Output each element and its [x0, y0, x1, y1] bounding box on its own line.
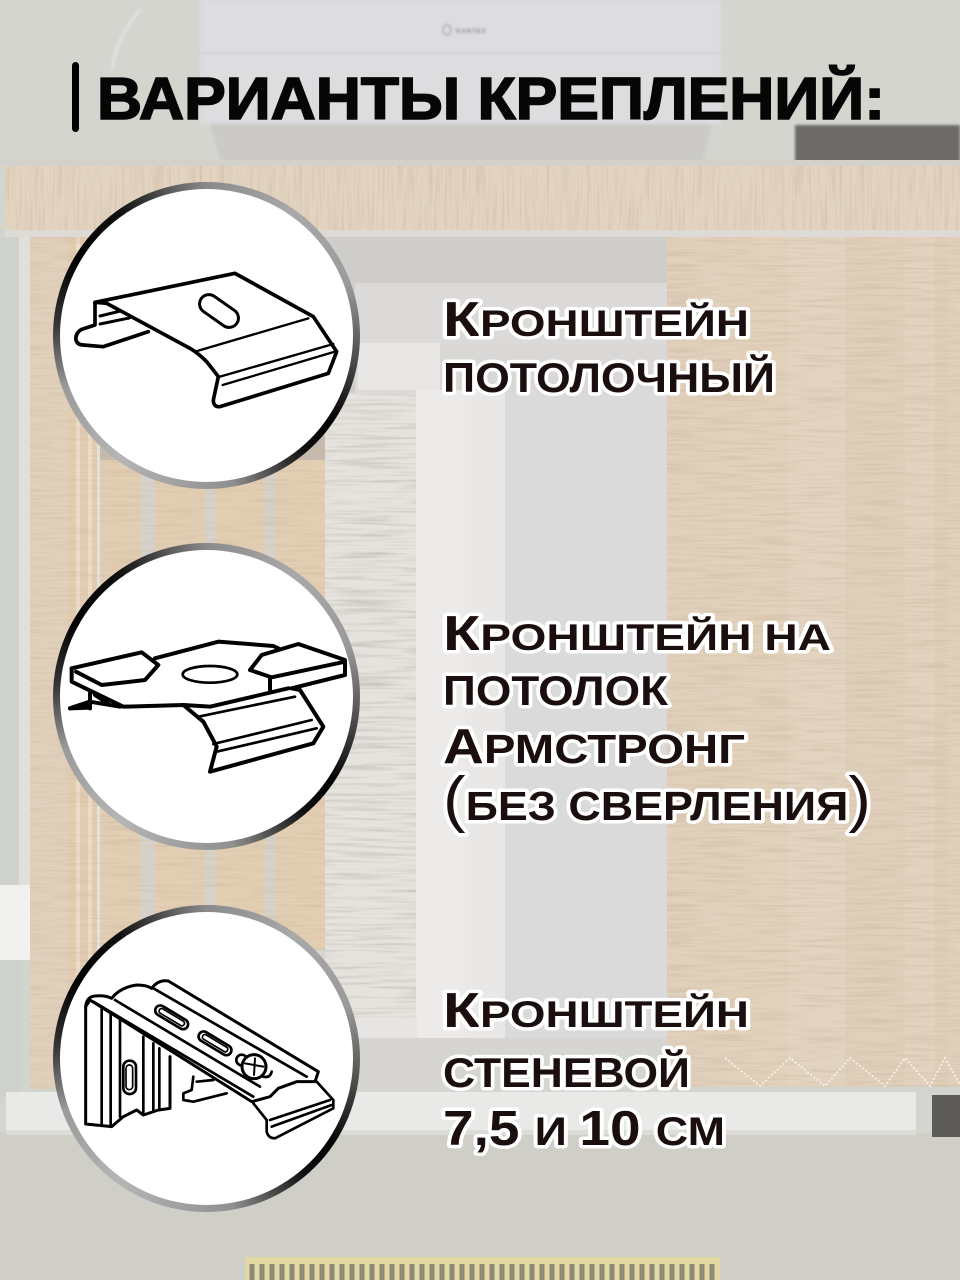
circle 1: ceiling bracket icon	[53, 182, 360, 489]
radiator	[245, 1257, 720, 1280]
label: wall bracket: СТЕНЕВОЙ	[443, 1048, 690, 1096]
title with accent bar: ВАРИАНТЫ КРЕПЛЕНИЙ:	[97, 65, 885, 132]
valance	[0, 160, 960, 237]
air conditioner: DANTEX	[456, 29, 487, 35]
label: Armstrong ceiling bracket: (БЕЗ СВЕРЛЕНИЯ )	[443, 765, 871, 834]
label: ceiling bracket	[443, 293, 775, 401]
label: Armstrong ceiling bracket: ПОТОЛОК	[443, 667, 668, 714]
circle 3: wall bracket icon	[53, 905, 360, 1212]
icon: Armstrong bracket	[68, 640, 347, 774]
right blinds	[667, 237, 960, 1087]
label: wall bracket	[443, 984, 749, 1156]
label: wall bracket: 7,5 И 10 СМ	[443, 1102, 725, 1156]
left blinds	[0, 237, 325, 1097]
label: ceiling bracket: ПОТОЛОЧНЫЙ	[443, 353, 775, 401]
window opening	[0, 232, 960, 1092]
icon: ceiling bracket	[74, 272, 338, 408]
window sill	[0, 1092, 960, 1280]
circle 2: Armstrong ceiling bracket icon	[53, 543, 360, 850]
icon: wall bracket	[84, 979, 335, 1140]
label: Armstrong ceiling bracket: КРОНШТЕЙН НА	[443, 607, 831, 661]
air conditioner	[112, 0, 960, 167]
label: Armstrong ceiling bracket: АРМСТРОНГ	[443, 720, 745, 774]
label: wall bracket: КРОНШТЕЙН	[443, 984, 749, 1038]
label: ceiling bracket: КРОНШТЕЙН	[443, 293, 749, 347]
label: Armstrong ceiling bracket	[443, 607, 871, 834]
